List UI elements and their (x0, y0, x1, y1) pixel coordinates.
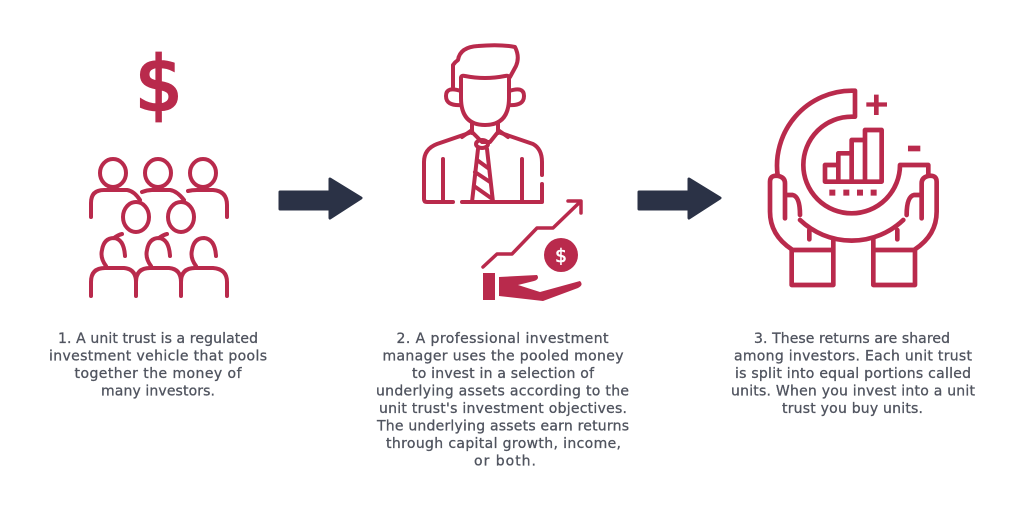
text: step 2: unit trust's investment objectives. (379, 401, 627, 417)
text: step 2: through capital growth, income, (386, 436, 621, 452)
text: step 1: many investors. (101, 384, 215, 400)
icon: group of investors (91, 159, 227, 296)
text: step 1: together the money of (74, 366, 243, 382)
text: step 2: or both. (474, 454, 536, 470)
text: step 3: trust you buy units. (782, 401, 923, 417)
icon: hand with rising chart and coin (483, 201, 582, 301)
icon: dollar sign: $ (135, 40, 183, 128)
arrow: step 2 to step 3 (639, 179, 720, 218)
plus (866, 95, 887, 115)
text: step 3: 3. These returns are shared (754, 331, 950, 347)
icon: hands holding returns chart (770, 91, 937, 285)
rising line chart (483, 201, 581, 267)
text: step 2: underlying assets according to the (376, 384, 629, 400)
hand (483, 273, 582, 301)
text: step 2 (376, 331, 629, 470)
text: step 3: units. When you invest into a unit (731, 384, 976, 400)
text: step 1: 1. A unit trust is a regulated (58, 331, 258, 347)
text: step 1: investment vehicle that pools (49, 348, 267, 364)
coin dollar: $ (555, 245, 567, 267)
text: step 1 (49, 331, 267, 400)
text: step 2: The underlying assets earn returns (376, 418, 629, 434)
minus (908, 146, 920, 151)
icon: investment manager (424, 45, 542, 202)
text: step 3: among investors. Each unit trust (734, 348, 972, 364)
text: step 3 (731, 331, 976, 417)
text: step 2: manager uses the pooled money (382, 348, 624, 364)
text: step 2: 2. A professional investment (396, 331, 609, 347)
text: step 3: is split into equal portions called (735, 366, 971, 382)
dots (829, 190, 877, 196)
text: step 2: to invest in a selection of (412, 366, 595, 382)
arrow: step 1 to step 2 (280, 179, 361, 218)
coin (544, 238, 578, 272)
